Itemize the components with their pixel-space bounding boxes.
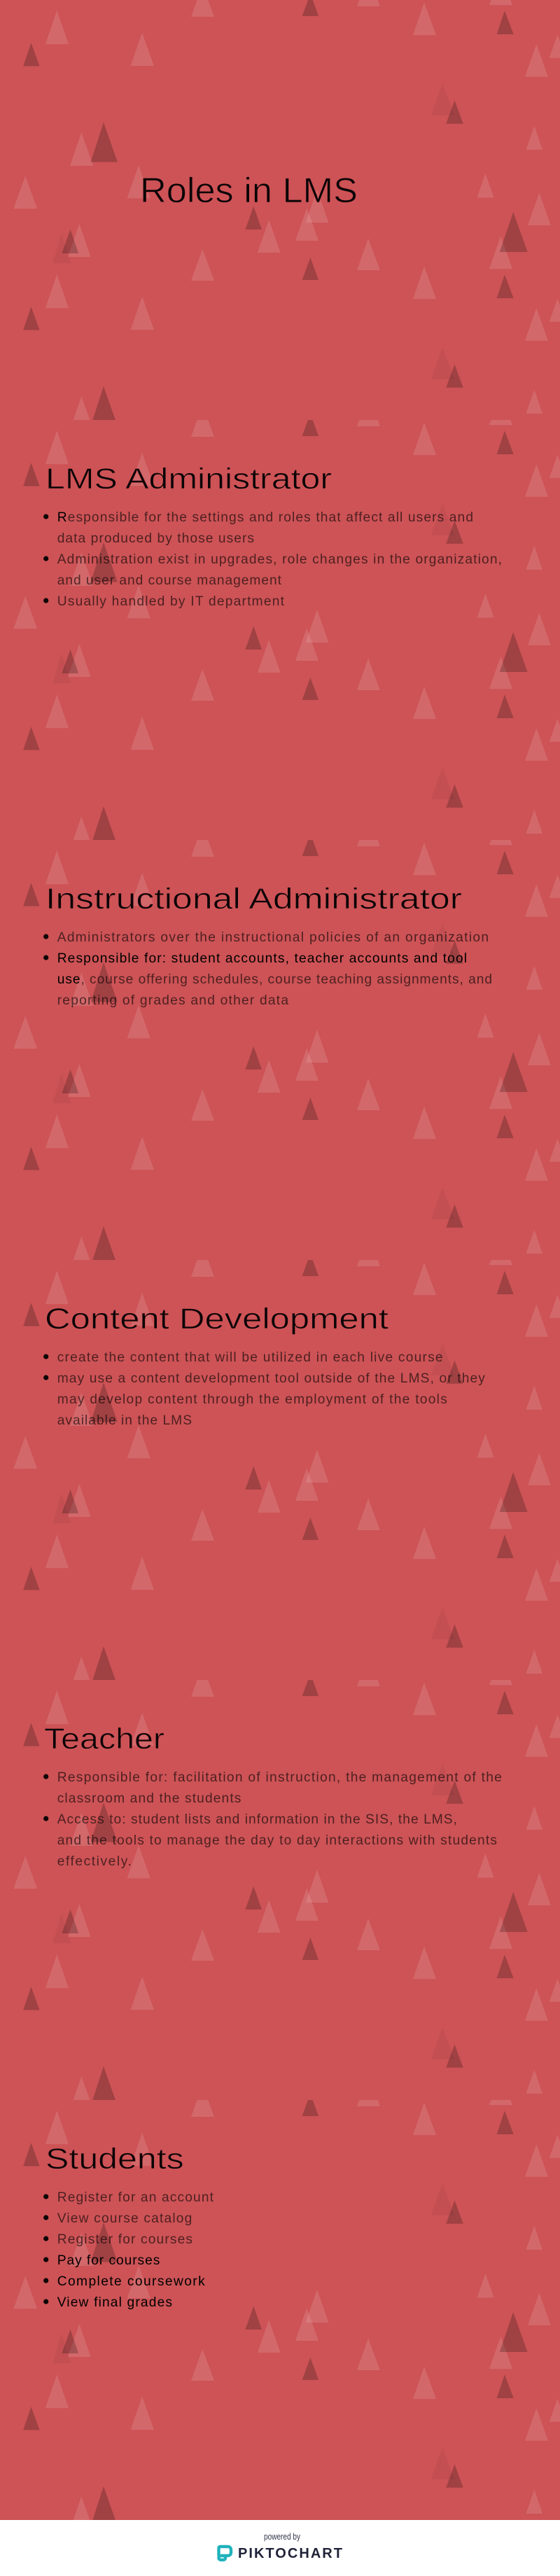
bullet list: Students: View final grades: [57, 2295, 172, 2310]
bullet list: Content Development: create the content that will be utilized in each live course: [57, 1350, 443, 1365]
heading: Teacher: Teacher: [44, 1722, 164, 1755]
bullet list: Teacher: [43, 1770, 502, 1869]
panel: Students: [0, 2100, 560, 2520]
bullet list: Teacher: Access to: student lists and information in the SIS, the LMS,: [57, 1812, 457, 1827]
heading: Instructional Administrator: Instructional Administrator: [46, 882, 462, 915]
bullet list: Instructional Administrator: [43, 930, 492, 1008]
text: powered by: powered by: [264, 2532, 301, 2542]
bullet list: Teacher: and the tools to manage the day to day interactions with students: [57, 1833, 497, 1848]
bullet list: Content Development: [43, 1350, 485, 1428]
bullet list: Students: View course catalog: [57, 2211, 192, 2226]
bullet list: LMS Administrator: data produced by those users: [57, 531, 254, 546]
wordmark: PIKTOCHART: PIKTOCHART: [238, 2546, 342, 2561]
bullet list: LMS Administrator: Responsible for the settings and roles that affect all users and: [57, 510, 473, 525]
heading: LMS Administrator: LMS Administrator: [46, 462, 332, 495]
title: Roles in LMS: [140, 171, 358, 210]
panel: Instructional Administrator: [0, 840, 560, 1260]
bullet list: Instructional Administrator: Responsible for: student accounts, teacher accounts and tool: [57, 951, 467, 966]
bullet list: Students: [43, 2190, 214, 2310]
heading: Students: Students: [46, 2142, 184, 2175]
bullet list: LMS Administrator: Administration exist in upgrades, role changes in the organization,: [57, 552, 502, 567]
bullet list: LMS Administrator: and user and course management: [57, 573, 282, 588]
panel: title section: [0, 0, 560, 420]
bullet list: Students: Register for courses: [57, 2232, 192, 2247]
bullet list: Content Development: may develop content through the employment of the tools: [57, 1392, 447, 1407]
footer: powered by Piktochart: [0, 2520, 560, 2576]
panel: Teacher: [0, 1680, 560, 2100]
icon: Piktochart logo: [218, 2547, 231, 2560]
panel: LMS Administrator: [0, 420, 560, 840]
panel: Content Development: [0, 1260, 560, 1680]
bullet list: Teacher: Responsible for: facilitation of instruction, the management of the: [57, 1770, 502, 1785]
bullet list: LMS Administrator: [43, 510, 502, 609]
bullet list: Content Development: available in the LMS: [57, 1413, 192, 1428]
bullet list: Students: Register for an account: [57, 2190, 214, 2205]
bullet list: Instructional Administrator: reporting of grades and other data: [57, 993, 288, 1008]
bullet list: Students: Complete coursework: [57, 2274, 205, 2289]
bullet list: Teacher: effectively.: [57, 1854, 132, 1869]
bullet list: Instructional Administrator: Administrators over the instructional policies of an organization: [57, 930, 489, 945]
bullet list: LMS Administrator: Usually handled by IT department: [57, 594, 285, 609]
bullet list: Content Development: may use a content development tool outside of the LMS, or they: [57, 1371, 485, 1386]
heading: Content Development: Content Development: [45, 1302, 388, 1335]
bullet list: Students: Pay for courses: [57, 2253, 160, 2268]
bullet list: Teacher: classroom and the students: [57, 1791, 241, 1806]
bullet list: Instructional Administrator: use, course offering schedules, course teaching assignments, and: [57, 972, 492, 987]
